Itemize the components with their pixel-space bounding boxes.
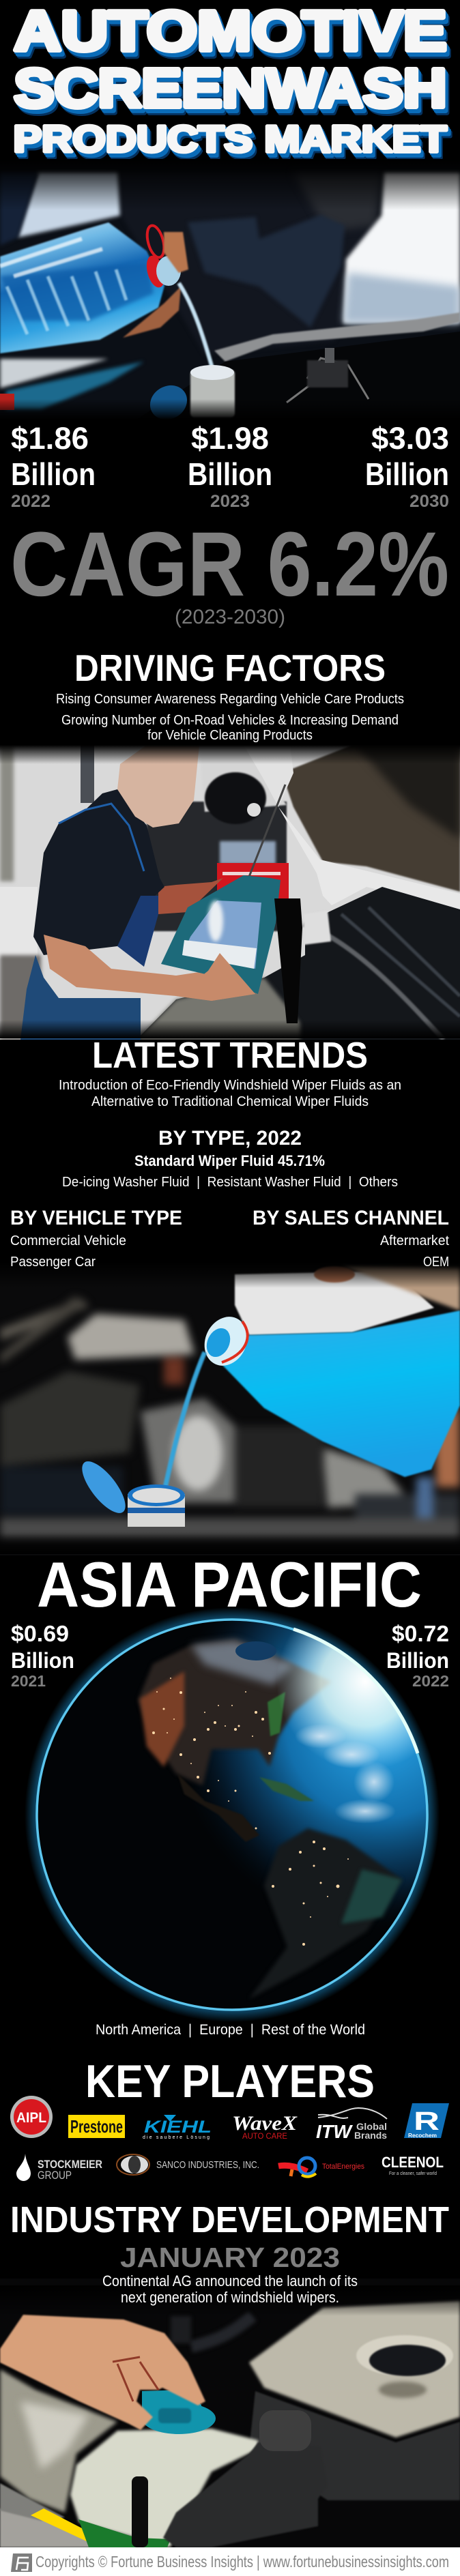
date: JANUARY 2023 bbox=[120, 2242, 340, 2273]
stat: 2022 bbox=[11, 421, 96, 511]
regional stat: 2022: Billion bbox=[386, 1648, 449, 1673]
market size stats bbox=[11, 421, 449, 511]
icon: reservoir with open cap bbox=[82, 1461, 185, 1527]
logo: Recochem: R bbox=[414, 2107, 440, 2136]
globe bbox=[25, 1593, 454, 2022]
other regions: North America | Europe | Rest of the World bbox=[96, 2022, 365, 2038]
title: PRODUCTS MARKET bbox=[14, 117, 447, 160]
logo: WaveX Auto Care: WaveX bbox=[232, 2112, 298, 2135]
stat: 2022: $1.86 bbox=[11, 421, 89, 456]
stat: 2023: $1.98 bbox=[191, 421, 269, 456]
landmass: North America bbox=[138, 1639, 332, 1842]
logo: Kiehl bbox=[143, 2115, 212, 2140]
regional stat: 2021: 2021 bbox=[11, 1672, 46, 1690]
by type block: De-icing Washer Fluid | Resistant Washer Fluid | Others bbox=[62, 1175, 398, 1190]
logo: Stockmeier Group bbox=[16, 2154, 102, 2182]
stat: 2030: 2030 bbox=[409, 492, 449, 511]
by vehicle type block: Passenger Car bbox=[10, 1255, 96, 1270]
landmass: South America bbox=[249, 1828, 402, 1999]
logo: Cleenol bbox=[382, 2154, 444, 2176]
by sales channel block: BY SALES CHANNEL bbox=[253, 1207, 449, 1229]
by sales channel block: Aftermarket bbox=[380, 1233, 449, 1248]
reservoir bbox=[70, 2429, 258, 2547]
logo: Stockmeier Group: STOCKMEIER bbox=[38, 2158, 102, 2171]
icon: Fortune Business Insights logo bbox=[11, 2553, 32, 2572]
by vehicle type block bbox=[10, 1207, 182, 1270]
photo: pouring washer fluid into reservoir bbox=[0, 159, 460, 426]
latest trends text bbox=[59, 1078, 401, 1109]
logo: Cleenol: CLEENOL bbox=[382, 2154, 444, 2171]
stat: 2022: 2022 bbox=[11, 492, 51, 511]
logo: Kiehl: KIEHL bbox=[144, 2118, 212, 2137]
hand bbox=[0, 2315, 205, 2430]
driving factors text: Rising Consumer Awareness Regarding Vehicle Care Products bbox=[56, 692, 404, 707]
logo: WaveX Auto Care: AUTO CARE bbox=[242, 2131, 287, 2141]
icon: red bottle cap bbox=[143, 224, 181, 289]
logo: Cleenol: For a cleaner, safer world bbox=[389, 2171, 437, 2176]
logos: key players bbox=[10, 2096, 449, 2182]
title: AUTOMOTIVE bbox=[14, 0, 446, 63]
logo: ITW Global Brands: ITW bbox=[316, 2121, 354, 2142]
announcement text: Continental AG announced the launch of its bbox=[102, 2272, 358, 2289]
heading: driving factors: DRIVING FACTORS bbox=[74, 647, 386, 689]
regional stat: 2021 bbox=[11, 1621, 74, 1690]
latest trends text: Alternative to Traditional Chemical Wiper Fluids bbox=[91, 1094, 369, 1109]
regional stat: 2021: $0.69 bbox=[11, 1621, 69, 1646]
rear toolbox and bottles bbox=[217, 841, 289, 898]
logo: Prestone bbox=[68, 2115, 125, 2138]
black reservoir housing bbox=[163, 2410, 327, 2547]
logo: AIPL: AIPL bbox=[16, 2110, 46, 2126]
by type block: BY TYPE, 2022 bbox=[158, 1127, 302, 1150]
logo: ITW Global Brands: Brands bbox=[354, 2130, 387, 2141]
by sales channel block: OEM bbox=[423, 1255, 449, 1270]
by type block: Standard Wiper Fluid 45.71% bbox=[134, 1152, 325, 1169]
stat: 2022: Billion bbox=[11, 456, 96, 492]
stat: 2023: Billion bbox=[188, 456, 272, 492]
regional stat: 2022: $0.72 bbox=[392, 1621, 449, 1646]
announcement text bbox=[102, 2272, 358, 2306]
by vehicle type block: Commercial Vehicle bbox=[10, 1233, 126, 1248]
logo: AIPL bbox=[10, 2096, 53, 2138]
logo: Recochem: Recochem bbox=[408, 2133, 437, 2139]
logo: ITW Global Brands: Global bbox=[356, 2121, 387, 2132]
by type block bbox=[62, 1127, 398, 1190]
regional stat: 2021: Billion bbox=[11, 1648, 74, 1673]
logo: Kiehl: die saubere Lösung bbox=[143, 2135, 210, 2140]
engine cover bbox=[249, 2301, 460, 2500]
logo: TotalEnergies: TotalEnergies bbox=[322, 2163, 364, 2171]
heading: Asia Pacific: ASIA PACIFIC bbox=[37, 1549, 422, 1620]
driving factors text bbox=[56, 692, 404, 743]
atmosphere glare and clouds bbox=[278, 1632, 415, 1823]
stat: 2030 bbox=[365, 421, 449, 511]
stat: 2023: 2023 bbox=[210, 492, 250, 511]
footer bar bbox=[0, 2547, 460, 2576]
logo: TotalEnergies bbox=[278, 2158, 364, 2177]
city lights bbox=[152, 1678, 349, 1946]
logo: Sanco Industries: SANCO INDUSTRIES, INC. bbox=[156, 2159, 259, 2171]
CAGR period: (2023-2030) bbox=[175, 606, 285, 628]
regional stat: 2022: 2022 bbox=[412, 1672, 449, 1690]
logo: ITW Global Brands bbox=[316, 2108, 387, 2142]
title: SCREENWASH bbox=[14, 57, 446, 119]
icon: bottle of blue fluid bbox=[0, 222, 164, 353]
heading: latest trends: LATEST TRENDS bbox=[92, 1035, 368, 1076]
driving factors text: Growing Number of On-Road Vehicles & Increasing Demand bbox=[61, 713, 399, 728]
driving factors text: for Vehicle Cleaning Products bbox=[147, 728, 313, 743]
stat: 2023 bbox=[188, 421, 272, 511]
logo: Recochem bbox=[404, 2103, 449, 2139]
latest trends text: Introduction of Eco-Friendly Windshield Wiper Fluids as an bbox=[59, 1078, 401, 1093]
stat: 2030: $3.03 bbox=[371, 421, 449, 456]
heading: key players: KEY PLAYERS bbox=[85, 2055, 375, 2107]
logo: Prestone: Prestone bbox=[70, 2116, 123, 2137]
icon: teal cap bbox=[142, 2390, 216, 2434]
stat: 2030: Billion bbox=[365, 456, 449, 492]
by sales channel block bbox=[253, 1207, 449, 1270]
photo: blue fluid poured from jug into reservoir bbox=[0, 1262, 460, 1555]
photo: hand opening reservoir cap bbox=[0, 2279, 460, 2547]
title bbox=[14, 0, 447, 160]
by vehicle type block: BY VEHICLE TYPE bbox=[10, 1207, 182, 1229]
announcement text: next generation of windshield wipers. bbox=[121, 2289, 339, 2306]
icon: pouring jug bbox=[197, 1265, 460, 1477]
mechanic figure bbox=[20, 745, 255, 1040]
regional stat: 2022 bbox=[386, 1621, 449, 1690]
logo: Sanco Industries bbox=[117, 2154, 259, 2175]
logo: Stockmeier Group: GROUP bbox=[38, 2169, 72, 2182]
icon: teal jug bbox=[161, 875, 281, 1001]
photo: mechanic holding jug at open hood bbox=[0, 745, 460, 1040]
